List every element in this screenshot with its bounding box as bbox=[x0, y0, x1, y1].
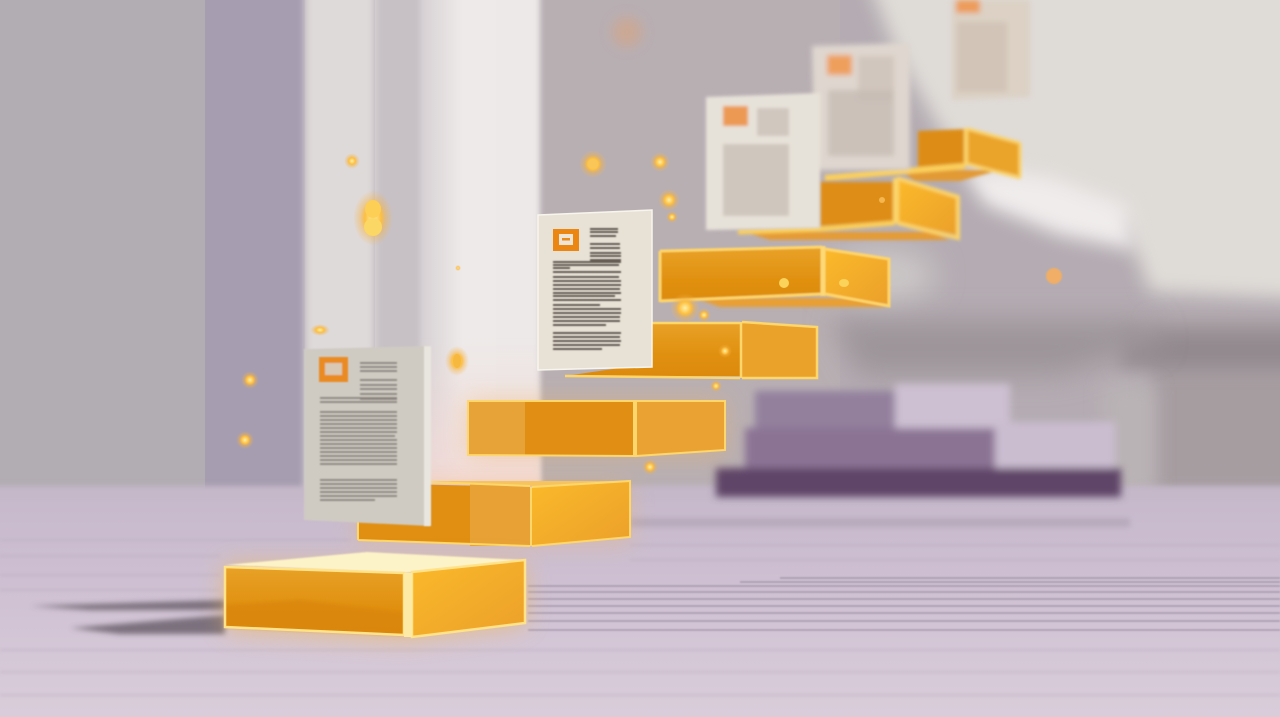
glowing sparks bbox=[236, 17, 1062, 475]
document 2: sharp centre document bbox=[538, 210, 652, 370]
document 5 (far top) bbox=[952, 0, 1030, 100]
step 6 bbox=[738, 178, 958, 240]
document 4 bbox=[812, 43, 910, 170]
step 5 bbox=[660, 246, 889, 307]
step 7 bbox=[825, 128, 1020, 181]
background purple stairs bbox=[716, 384, 1121, 497]
shadows of lowest step bbox=[30, 600, 225, 634]
step 1: base block bbox=[225, 552, 525, 640]
step 3 bbox=[468, 400, 725, 456]
step 4 bbox=[565, 322, 817, 378]
floor bbox=[0, 486, 1280, 717]
document icon bbox=[553, 229, 579, 251]
step 2 bbox=[358, 481, 630, 546]
document text lines bbox=[553, 229, 621, 349]
document 3 bbox=[706, 93, 820, 230]
light upper-right wall bbox=[860, 0, 1280, 300]
document 1 bbox=[304, 346, 431, 526]
